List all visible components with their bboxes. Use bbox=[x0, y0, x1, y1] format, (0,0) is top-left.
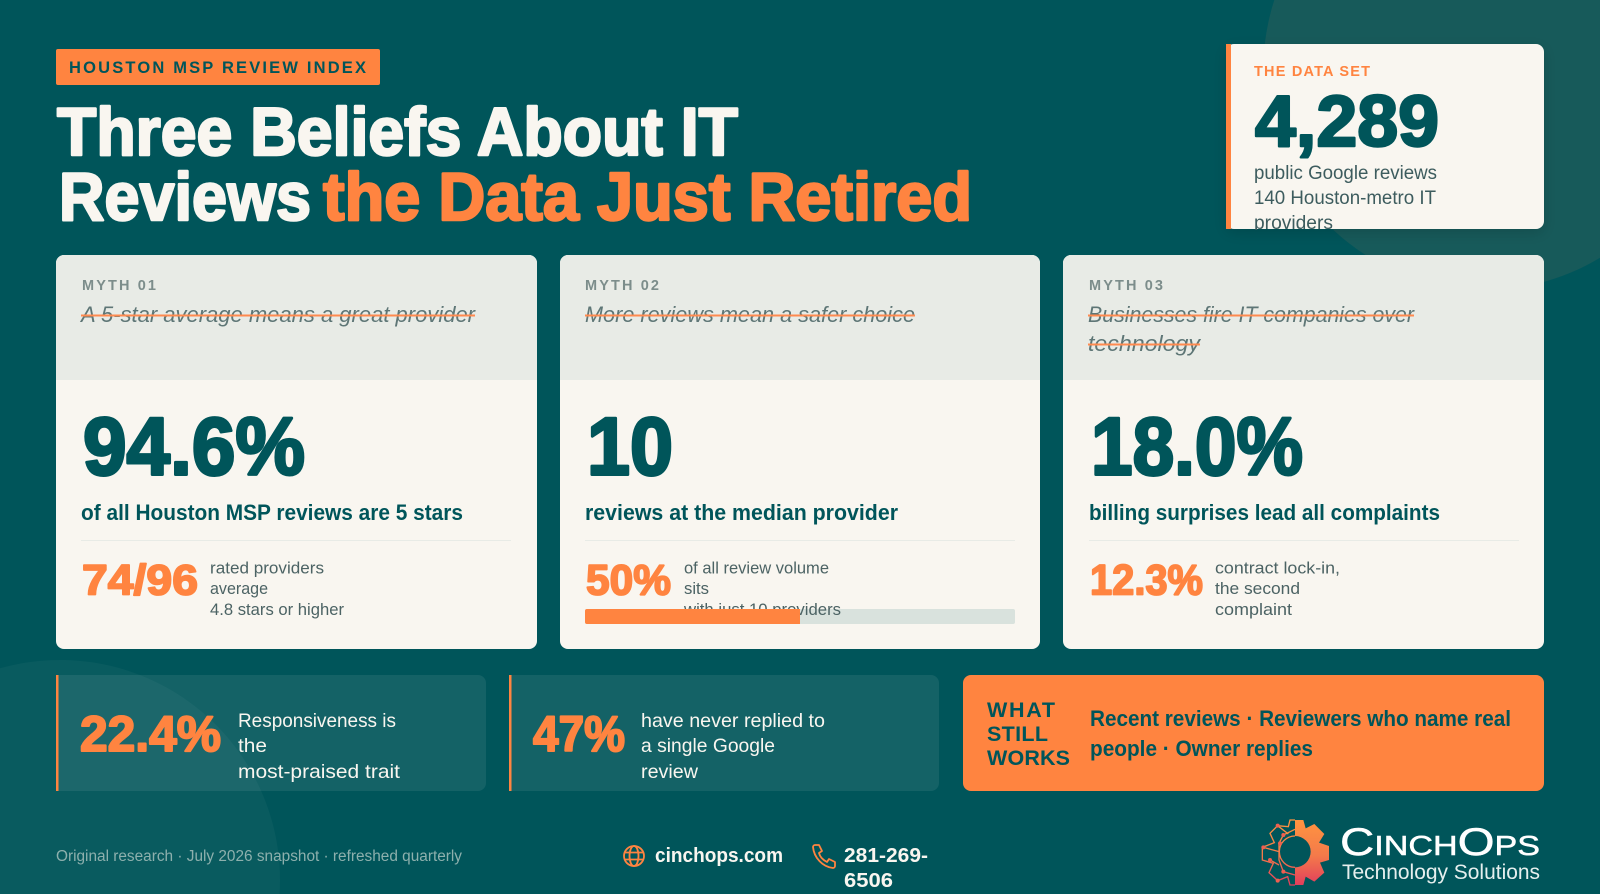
what still works label: WHAT bbox=[987, 698, 1055, 722]
myth 01 secondary description: 4.8 stars or higher bbox=[210, 601, 345, 619]
myth 01 secondary description: average bbox=[210, 580, 268, 598]
myth 03 statement: billing surprises lead all complaints bbox=[1089, 500, 1440, 525]
myth 01 big number: 94.6% bbox=[83, 402, 305, 492]
what still works list bbox=[1090, 706, 1511, 761]
panel: what still works bbox=[963, 675, 1544, 791]
footer source note: Original research · July 2026 snapshot · refreshed quarterly bbox=[56, 848, 462, 865]
panel: myth 02 bbox=[560, 255, 1040, 649]
myth 02 label: MYTH 02 bbox=[585, 278, 659, 294]
myth 01 label: MYTH 01 bbox=[82, 278, 156, 294]
responsiveness text: the bbox=[238, 735, 267, 757]
title: the Data Just Retired bbox=[323, 159, 972, 235]
myth 03 belief: Businesses fire IT companies over bbox=[1088, 302, 1416, 327]
logo tagline: Technology Solutions bbox=[1342, 861, 1540, 884]
icon: gear bbox=[1261, 820, 1329, 885]
myth 03 secondary description: contract lock-in, bbox=[1215, 560, 1340, 578]
myth 03 belief bbox=[1088, 302, 1416, 356]
myth 01 secondary description bbox=[210, 560, 345, 619]
data set description: providers bbox=[1254, 213, 1333, 234]
what still works label: WORKS bbox=[987, 746, 1070, 770]
responsiveness text: Responsiveness is bbox=[238, 710, 396, 732]
myth 03 secondary description bbox=[1215, 560, 1340, 619]
responsiveness text bbox=[238, 710, 401, 783]
myth 02 progress track bbox=[585, 609, 1015, 624]
what still works list: people · Owner replies bbox=[1090, 736, 1313, 761]
myth 01 secondary stat: 74/96 bbox=[82, 556, 198, 604]
title: Three Beliefs About IT bbox=[57, 94, 738, 170]
myth 01 secondary description: rated providers bbox=[210, 560, 324, 578]
icon: phone bbox=[813, 845, 835, 868]
panel: the data set bbox=[1226, 44, 1544, 234]
myth 03 secondary description: the second bbox=[1215, 580, 1300, 598]
logo: CinchOps bbox=[1261, 820, 1540, 885]
responsiveness number: 22.4% bbox=[80, 706, 221, 762]
icon: globe bbox=[624, 846, 644, 866]
myth 02 secondary stat: 50% bbox=[586, 556, 671, 604]
never replied text: have never replied to bbox=[641, 710, 825, 732]
what still works label: STILL bbox=[987, 722, 1048, 746]
phone number: 6506 bbox=[844, 869, 893, 892]
header tag: HOUSTON MSP REVIEW INDEX bbox=[69, 59, 366, 77]
decorative circle top right bbox=[1263, 0, 1600, 290]
data set description: 140 Houston-metro IT bbox=[1254, 188, 1436, 209]
panel: myth 01 bbox=[56, 255, 537, 649]
decorative circle bottom left bbox=[0, 660, 280, 894]
phone number: 281-269- bbox=[844, 844, 928, 867]
myth 02 belief: More reviews mean a safer choice bbox=[585, 302, 915, 327]
responsiveness text: most-praised trait bbox=[238, 761, 401, 783]
myth 02 big number: 10 bbox=[587, 402, 673, 492]
data set description bbox=[1254, 163, 1437, 234]
title bbox=[57, 94, 972, 235]
myth 02 progress fill bbox=[585, 609, 800, 624]
data set description: public Google reviews bbox=[1254, 163, 1437, 184]
myth 03 big number: 18.0% bbox=[1091, 402, 1303, 492]
what still works label bbox=[987, 698, 1070, 770]
panel: never replied stat bbox=[509, 675, 939, 791]
panel: myth 03 bbox=[1063, 255, 1544, 649]
myth 03 secondary stat: 12.3% bbox=[1090, 556, 1203, 604]
myth 01 belief: A 5-star average means a great provider bbox=[79, 302, 477, 327]
header tag bbox=[56, 49, 380, 85]
myth 02 secondary description: with just 10 providers bbox=[683, 601, 841, 619]
myth 03 secondary description: complaint bbox=[1215, 601, 1292, 619]
myth 03 belief: technology bbox=[1088, 331, 1202, 356]
never replied number: 47% bbox=[533, 706, 625, 762]
never replied text bbox=[641, 710, 825, 783]
data set label: THE DATA SET bbox=[1254, 64, 1370, 80]
title: Reviews bbox=[59, 159, 311, 235]
data set number: 4,289 bbox=[1255, 82, 1439, 162]
myth 01 statement: of all Houston MSP reviews are 5 stars bbox=[81, 500, 463, 525]
myth 03 label: MYTH 03 bbox=[1089, 278, 1163, 294]
myth 02 statement: reviews at the median provider bbox=[585, 500, 898, 525]
website: cinchops.com bbox=[655, 844, 783, 867]
never replied text: review bbox=[641, 761, 699, 783]
never replied text: a single Google bbox=[641, 735, 775, 757]
panel: responsiveness stat bbox=[56, 675, 486, 791]
logo wordmark: CINCH OPS bbox=[1340, 821, 1540, 864]
phone number bbox=[844, 844, 928, 892]
myth 02 secondary description bbox=[683, 560, 841, 619]
what still works list: Recent reviews · Reviewers who name real bbox=[1090, 706, 1511, 731]
myth 02 secondary description: sits bbox=[684, 580, 709, 598]
myth 02 secondary description: of all review volume bbox=[684, 560, 829, 578]
